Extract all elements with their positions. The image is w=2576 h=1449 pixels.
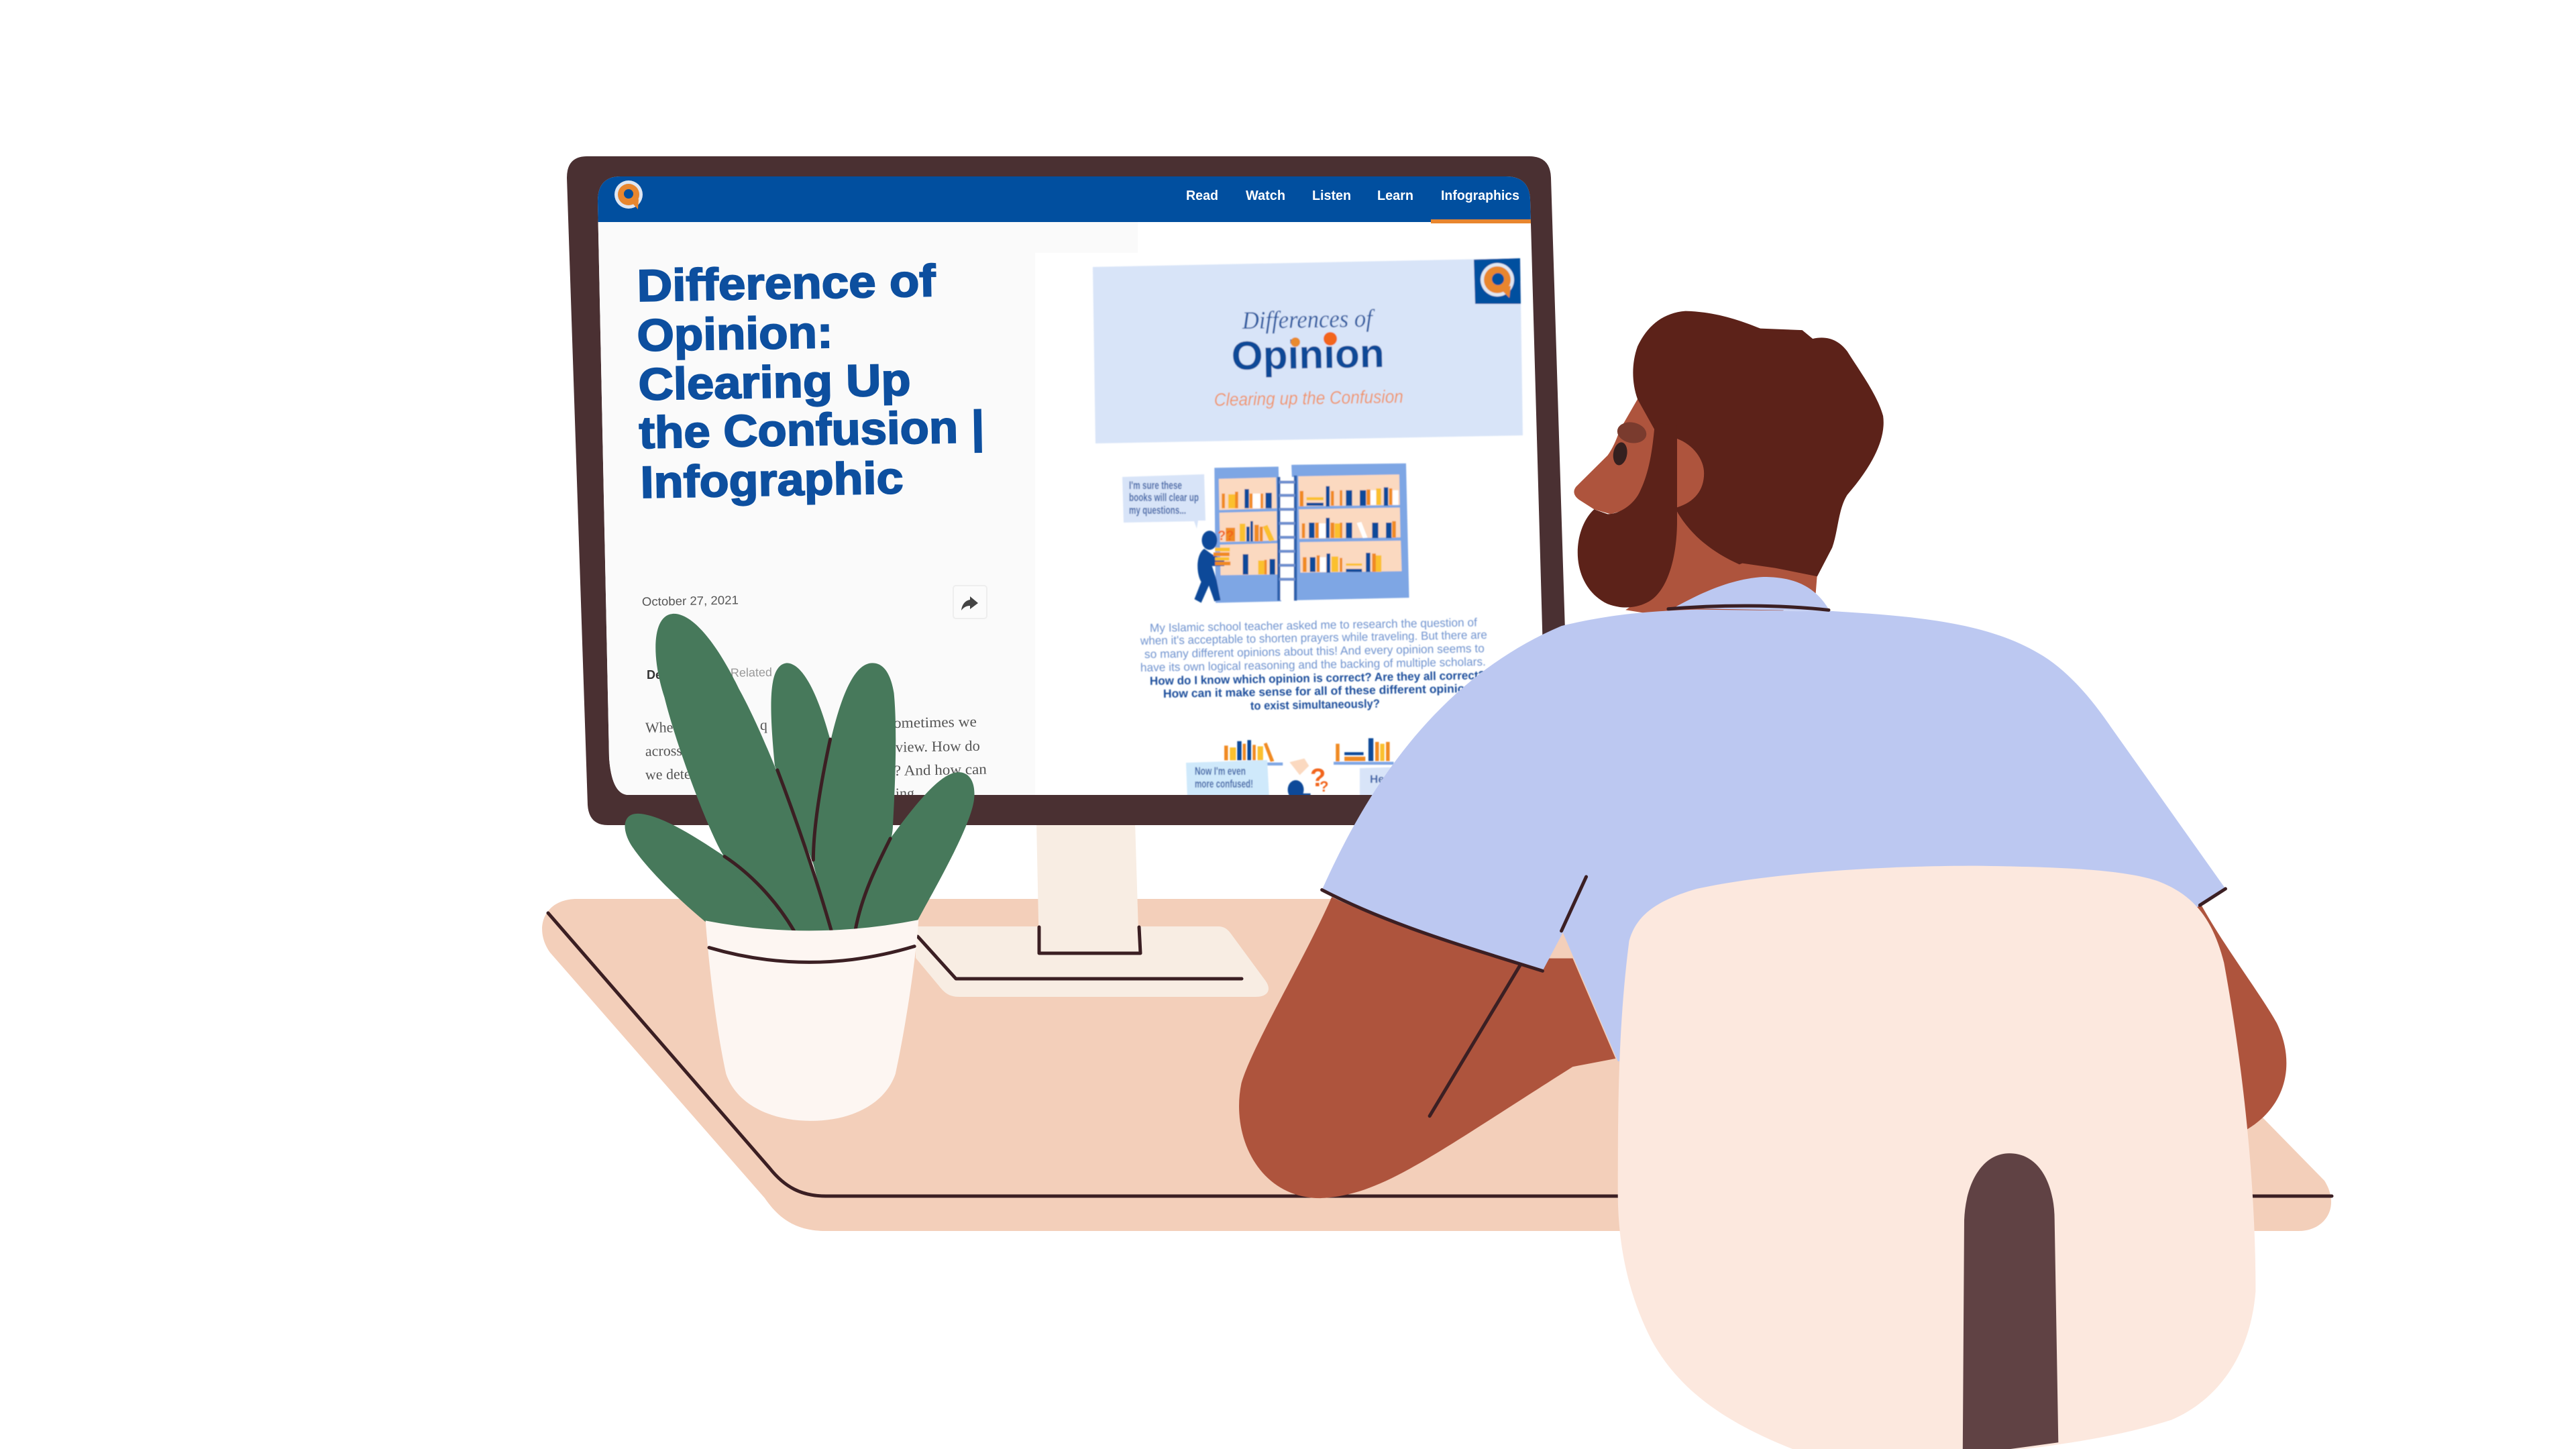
speech bubble: partially hidden <box>1360 767 1409 798</box>
article body text: we dete <box>645 765 691 783</box>
question marks: ? <box>1310 764 1326 792</box>
desk <box>542 899 2332 1231</box>
head and beard <box>1574 311 1884 614</box>
article tabs: Related <box>731 665 772 680</box>
website nav bar: Learn <box>1377 189 1413 203</box>
article title: Opinion: <box>637 307 833 361</box>
infographic intro paragraph: have its own logical reasoning and the backing of multiple scholars. <box>1140 655 1486 674</box>
monitor screen <box>590 171 1556 802</box>
article title: Difference of <box>637 256 936 311</box>
shirt collar <box>1674 577 1830 611</box>
embedded infographic <box>1093 258 1523 801</box>
eye <box>1612 441 1629 466</box>
illustration: man at desk viewing infographic <box>542 156 2333 1449</box>
speech bubble: now confused <box>1186 760 1269 798</box>
article body text: q <box>760 716 767 733</box>
leaves <box>625 614 975 932</box>
potted plant <box>625 614 975 1121</box>
question marks: ? <box>1320 778 1328 795</box>
infographic intro paragraph: when it's acceptable to shorten prayers while traveling. But there are <box>1140 628 1487 647</box>
article title: Infographic <box>640 453 904 508</box>
blue shirt <box>1322 610 2225 1083</box>
speech bubble: books <box>1122 474 1205 529</box>
leaf veins <box>724 739 890 930</box>
infographic intro paragraph <box>1140 615 1487 712</box>
icon: share button <box>953 586 987 619</box>
infographic intro paragraph: How can it make sense for all of these different opinions <box>1163 682 1479 700</box>
article title: the Confusion | <box>639 402 985 459</box>
article date: October 27, 2021 <box>642 593 739 608</box>
speech bubble: books: books will clear up <box>1129 491 1199 504</box>
confused question marks: ?? <box>1218 529 1234 543</box>
infographic intro paragraph: My Islamic school teacher asked me to research the question of <box>1150 615 1477 635</box>
chair back <box>1618 866 2255 1449</box>
man from behind <box>1239 311 2286 1449</box>
article body text: across <box>645 742 682 759</box>
article body text: ? And how can <box>894 761 987 779</box>
monitor bezel <box>567 156 1571 825</box>
article body text <box>645 713 987 802</box>
beard <box>1578 423 1677 607</box>
plant pot <box>706 920 918 1121</box>
article title: Clearing Up <box>638 355 911 410</box>
hair <box>1633 311 1884 576</box>
ear <box>1677 439 1704 507</box>
speech bubble: partially hidden: He <box>1370 773 1385 786</box>
infographic intro paragraph: so many different opinions about this! And every opinion seems to <box>1144 641 1485 661</box>
article title <box>637 256 985 508</box>
article tabs <box>647 665 772 682</box>
infographic header band <box>1093 258 1523 443</box>
left arm <box>1239 897 1615 1198</box>
article body text: view. How do <box>896 737 980 755</box>
speech bubble: now confused: more confused! <box>1195 777 1253 790</box>
monitor stand <box>916 822 1269 997</box>
eyebrow <box>1613 419 1651 447</box>
speech bubble: now confused: Now I'm even <box>1195 765 1246 777</box>
website nav bar: Read <box>1186 189 1218 203</box>
infographic title: Opinion <box>1231 331 1385 378</box>
article body text: ing <box>896 785 914 802</box>
chair post <box>1963 1153 2058 1449</box>
article panel background <box>598 222 628 795</box>
shirt and arm lines <box>1322 606 2225 1116</box>
article body text: Whe <box>645 718 674 736</box>
website nav bar: Infographics <box>1441 189 1519 203</box>
infographic intro paragraph: to exist simultaneously? <box>1250 697 1380 712</box>
lower shelves and confused reader <box>1224 738 1394 801</box>
website nav bar <box>598 176 1531 223</box>
infographic title <box>1214 305 1403 410</box>
icon: site logo <box>614 180 643 209</box>
right arm <box>2186 902 2286 1130</box>
article tabs: De <box>647 668 662 682</box>
website nav bar: Listen <box>1312 189 1351 203</box>
speech bubble: books: my questions... <box>1129 504 1186 517</box>
infographic title: Clearing up the Confusion <box>1214 386 1403 410</box>
infographic intro paragraph: How do I know which opinion is correct? Are they all correct? <box>1150 668 1485 688</box>
infographic title: Differences of <box>1242 305 1376 335</box>
speech bubble: books: I'm sure these <box>1129 479 1182 492</box>
article body text: ometimes we <box>894 713 977 731</box>
bookshelf illustration <box>1214 464 1409 603</box>
icon: infographic logo <box>1474 258 1521 304</box>
website nav bar: Watch <box>1246 189 1285 203</box>
figure carrying books <box>1194 531 1230 603</box>
